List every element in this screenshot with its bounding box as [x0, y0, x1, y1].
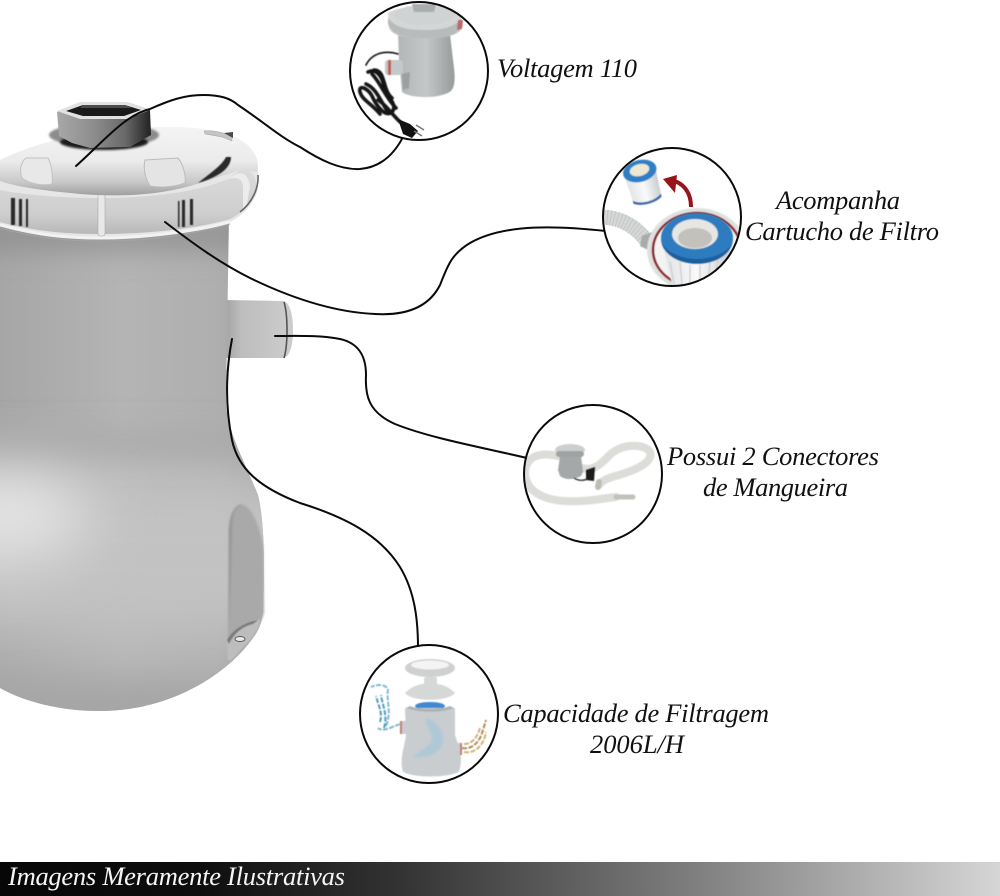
power cord coil [360, 52, 400, 122]
main filter pump illustration [0, 102, 293, 711]
label: voltage: Voltagem 110 [497, 53, 637, 83]
pump body [0, 224, 264, 711]
flexible hose [600, 217, 646, 240]
footer disclaimer bar [0, 861, 1000, 896]
leader line: hose connectors [275, 336, 527, 458]
label: hose connectors: Possui 2 Conectores [666, 441, 879, 471]
small cartridge [622, 158, 662, 206]
callout: filtration capacity thumbnail [360, 645, 498, 783]
disclaimer text: Imagens Meramente Ilustrativas [7, 861, 345, 891]
clean water splash [371, 685, 400, 730]
water swirl [413, 718, 443, 757]
callout: voltage thumbnail [350, 2, 488, 140]
label: hose connectors [666, 441, 879, 502]
hose kit [525, 446, 650, 501]
leader lines [76, 95, 606, 648]
mini pump with power cord [385, 4, 463, 97]
label: filtration capacity: 2006L/H [590, 729, 686, 759]
pump side port [224, 300, 293, 358]
leader line: filter cartridge [165, 222, 606, 314]
label: filter cartridge: Acompanha [774, 185, 900, 215]
callout: filter cartridge thumbnail [600, 148, 747, 292]
exploded pump view [400, 659, 462, 776]
label: filter cartridge [745, 185, 939, 246]
label: filter cartridge: Cartucho de Filtro [745, 216, 939, 246]
red arrow [663, 175, 691, 207]
power plug [398, 119, 424, 138]
leader line: filtration capacity [227, 339, 418, 648]
large cartridge [661, 213, 733, 285]
mini pump [555, 444, 595, 481]
hexagonal cap [49, 102, 159, 150]
filter lid [0, 127, 258, 195]
callout: hose connectors thumbnail [524, 405, 662, 543]
label: hose connectors: de Mangueira [703, 472, 848, 502]
ring ribs [11, 198, 193, 227]
label: filtration capacity [503, 698, 769, 759]
locking ring [0, 154, 258, 241]
body lower recess and foot [227, 505, 264, 660]
leader line: voltage [76, 95, 405, 169]
label: filtration capacity: Capacidade de Filtragem [503, 698, 769, 728]
dirty water splash [462, 720, 486, 752]
pump housing [640, 208, 739, 285]
